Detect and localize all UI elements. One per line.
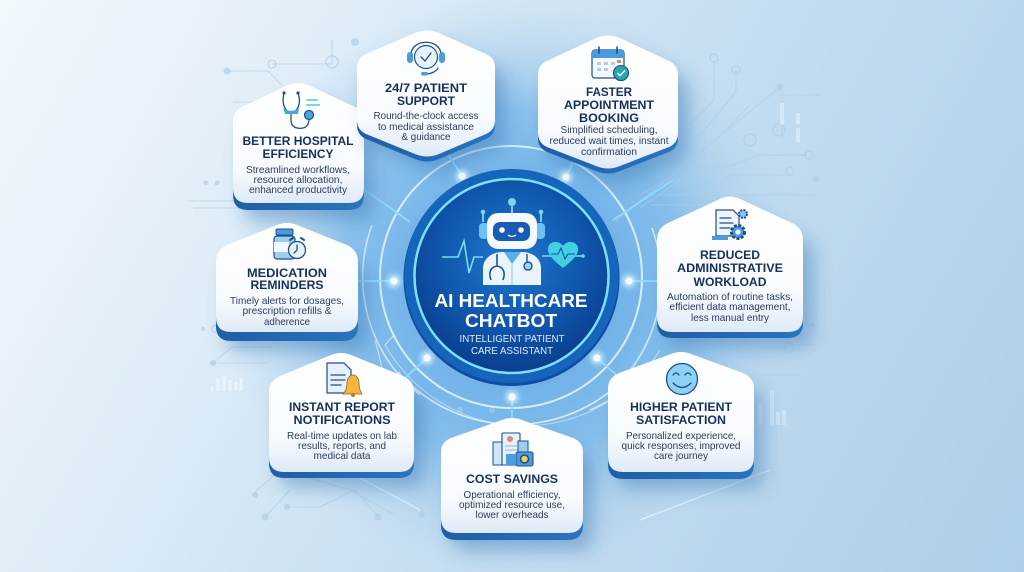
description: enhanced productivity — [249, 185, 348, 196]
central glow — [222, 0, 802, 572]
title: CHATBOT — [465, 310, 558, 331]
description: lower overheads — [476, 510, 548, 521]
icon: calendar check — [592, 47, 628, 80]
heading — [242, 134, 354, 161]
heading: BOOKING — [579, 111, 639, 125]
heading: ADMINISTRATIVE — [677, 261, 783, 275]
heading — [385, 81, 468, 108]
panel: better hospital efficiency — [233, 83, 364, 210]
heading — [630, 400, 733, 427]
description: adherence — [264, 317, 310, 328]
panel: reduced administrative workload — [657, 196, 803, 338]
hub disc — [404, 169, 620, 386]
description: medical data — [314, 451, 371, 462]
description: Personalized experience, — [626, 431, 736, 442]
description: Simplified scheduling, — [560, 125, 658, 136]
description: & guidance — [402, 132, 451, 143]
heading: 24/7 PATIENT — [385, 81, 468, 95]
panel: instant report notifications — [269, 353, 414, 478]
icon: clock headset — [407, 42, 445, 76]
heading: REDUCED — [700, 248, 760, 262]
central hub — [404, 169, 620, 386]
description: prescription refills & — [242, 306, 332, 317]
heading: MEDICATION — [247, 266, 327, 280]
description — [246, 165, 350, 196]
panel: higher patient satisfaction — [608, 352, 754, 479]
description: results, reports, and — [298, 441, 386, 452]
description: efficient data management, — [670, 302, 790, 313]
background circuit lines — [188, 38, 820, 520]
heading: SUPPORT — [397, 94, 456, 108]
description — [230, 296, 344, 328]
heading: HIGHER PATIENT — [630, 400, 733, 414]
icon: stethoscope — [282, 91, 320, 128]
subtitle: CARE ASSISTANT — [471, 345, 554, 357]
description: less manual entry — [691, 313, 770, 324]
description: Real-time updates on lab — [287, 431, 397, 442]
description — [550, 125, 669, 158]
icon: smiling face — [666, 364, 698, 394]
orbit rings — [363, 146, 661, 426]
heading: NOTIFICATIONS — [294, 413, 390, 427]
title: AI HEALTHCARE — [434, 290, 588, 311]
panel: 24/7 patient support — [357, 30, 495, 162]
description — [667, 292, 793, 324]
icon: robot doctor — [442, 198, 585, 285]
panel: faster appointment booking — [538, 36, 678, 174]
description: resource allocation, — [254, 175, 342, 186]
title — [434, 290, 588, 331]
panel: medication reminders — [216, 223, 358, 341]
panel: cost savings — [441, 418, 583, 540]
heading — [564, 85, 655, 125]
description: Round-the-clock access — [374, 111, 478, 122]
heading: BETTER HOSPITAL — [242, 134, 354, 148]
icon: pill bottle and clock — [274, 229, 306, 259]
heading: EFFICIENCY — [262, 147, 334, 161]
heading — [677, 248, 783, 289]
description: Streamlined workflows, — [246, 165, 350, 176]
description — [459, 490, 565, 521]
heading — [247, 266, 327, 292]
description: optimized resource use, — [459, 500, 565, 511]
description: reduced wait times, instant — [550, 136, 669, 147]
subtitle — [460, 333, 565, 357]
description: confirmation — [581, 147, 637, 158]
description: Timely alerts for dosages, — [230, 296, 344, 307]
description: to medical assistance — [378, 122, 474, 133]
heading — [289, 400, 396, 427]
heading: APPOINTMENT — [564, 98, 655, 112]
icon: hospital and camera — [493, 433, 533, 466]
description — [287, 431, 397, 462]
connector lines and glowing nodes — [358, 150, 673, 418]
icon: document and bell — [327, 363, 362, 397]
subtitle: INTELLIGENT PATIENT — [460, 333, 565, 345]
description: Automation of routine tasks, — [667, 292, 793, 303]
heading: INSTANT REPORT — [289, 400, 396, 414]
heading: WORKLOAD — [694, 275, 767, 289]
icon: document and gears — [712, 210, 747, 240]
heading: FASTER — [586, 85, 632, 99]
description: quick responses, improved — [622, 441, 741, 452]
description: care journey — [654, 451, 709, 462]
description — [622, 431, 741, 462]
heading: SATISFACTION — [636, 413, 726, 427]
description: Operational efficiency, — [464, 490, 560, 501]
description — [374, 111, 478, 143]
heading: COST SAVINGS — [466, 472, 558, 486]
heading: REMINDERS — [250, 278, 324, 292]
